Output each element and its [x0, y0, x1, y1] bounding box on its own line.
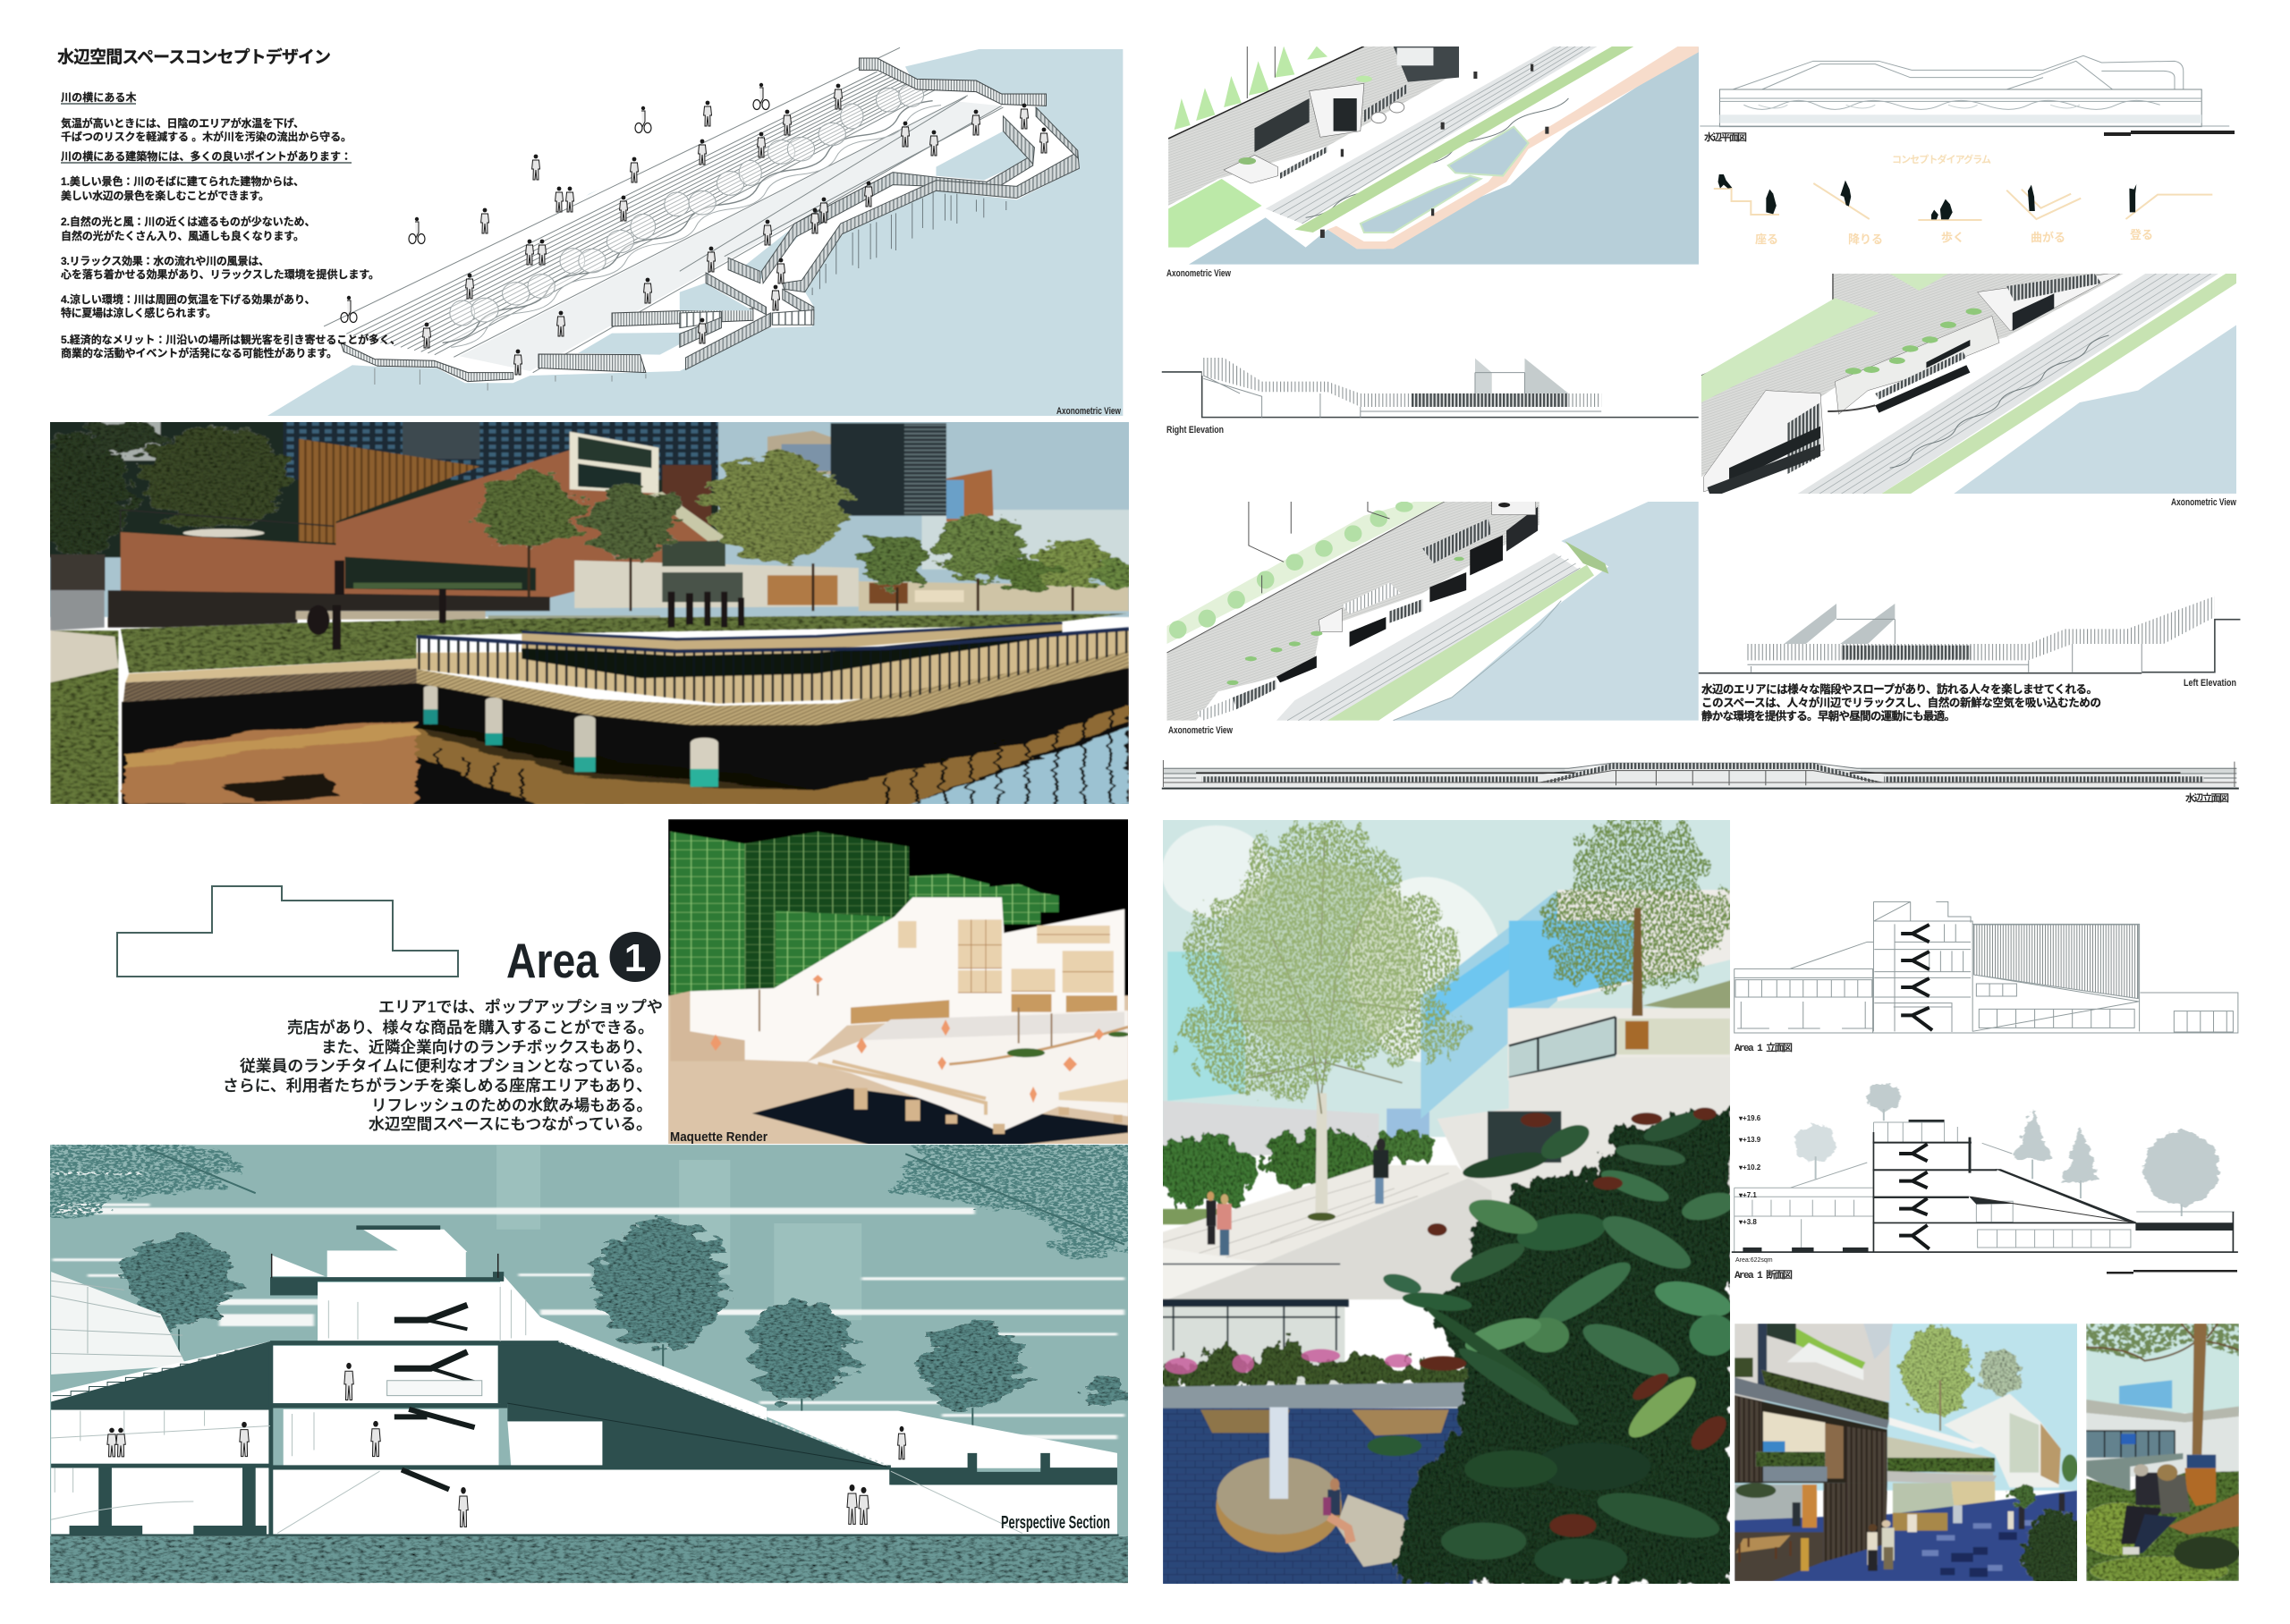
- text block: concept description: 3.リラックス効果：水の流れや川の風景は、: [61, 254, 269, 267]
- recess and courtyard: [1893, 1483, 1955, 1514]
- pools: [1361, 176, 1480, 233]
- timber bin: [2184, 1468, 2216, 1506]
- text block: concept description: 2.自然の光と風：川の近くは遮るものが少ないため、: [61, 215, 315, 228]
- water: [1189, 47, 1700, 265]
- text block: area 1 description: 水辺空間スペースにもつながっている。: [369, 1115, 652, 1133]
- foreground foliage mass: [1395, 1109, 1732, 1586]
- diagram labels: 座る: [1755, 233, 1778, 246]
- water: [1948, 325, 2236, 498]
- wave planter: [1306, 98, 1568, 217]
- diagram lines: [1714, 183, 2212, 220]
- dark water: [752, 1088, 1128, 1145]
- ground band: [50, 1536, 1131, 1583]
- human silhouettes: [307, 561, 744, 650]
- panel: maquette render: [668, 819, 1130, 1145]
- diagram labels: 曲がる: [2031, 231, 2065, 244]
- stepped band: [1266, 47, 1598, 224]
- title: 水辺空間スペースコンセプトデザイン: [57, 47, 331, 67]
- text block: concept description: 1.美しい景色：川のそばに建てられた建物からは、: [61, 174, 304, 188]
- section cut lines: [1732, 1120, 2238, 1253]
- text block: concept description: 自然の光がたくさん入り、風通しも良くなります。: [61, 229, 304, 242]
- stepped band: [1791, 274, 2218, 498]
- diagram: activity icons: [1714, 174, 2212, 220]
- stairs: elevation: [1901, 925, 1932, 1030]
- right white wing: [1944, 1393, 2061, 1487]
- drawing: long waterfront elevation: [1162, 760, 2239, 790]
- circular bench: [2168, 1493, 2239, 1535]
- trees behind: [1902, 1326, 2021, 1416]
- dark plinth: [108, 590, 550, 628]
- green strip: [1875, 274, 2236, 498]
- caption: waterfront elevation: 水辺立面図: [2185, 791, 2229, 804]
- blue pavement: [1163, 1408, 1473, 1586]
- sky: [1162, 817, 1732, 1137]
- text block: area 1 description: 従業員のランチタイムに便利なオプションとなっている。: [240, 1057, 652, 1075]
- model trees: [759, 984, 1051, 1046]
- text block: area 1 description: [223, 998, 663, 1133]
- pier columns: [424, 686, 718, 787]
- ghost trees: [450, 84, 924, 326]
- pier piles lower: [375, 368, 646, 391]
- text block: area 1 description: さらに、利用者たちがランチを楽しめる座席エリアもあり、: [223, 1077, 652, 1095]
- caption: left elevation: Left Elevation: [2184, 678, 2236, 689]
- window: [2086, 1431, 2175, 1458]
- terrace block: [1508, 1008, 1732, 1080]
- upper glazing: [570, 432, 658, 494]
- diagram labels: 降りる: [1848, 233, 1883, 246]
- neighbouring building left: [51, 1272, 186, 1374]
- building pieces: [1978, 274, 2120, 331]
- main boardwalk deck: [417, 629, 1129, 704]
- diagram labels: [1755, 228, 2153, 246]
- caption: area 1 section: Area 1 断面図: [1734, 1268, 1793, 1281]
- caption: waterfront plan: 水辺平面図: [1704, 131, 1747, 143]
- text block: concept description: 美しい水辺の景色を楽しむことができます。: [61, 189, 269, 202]
- section figures: [107, 1363, 905, 1527]
- soffit: [1642, 980, 1732, 1013]
- first tree trunk: [1315, 1093, 1327, 1217]
- broad leaves: [1368, 1106, 1737, 1579]
- pier piles: [812, 192, 1006, 295]
- scale bar: plan: [2104, 131, 2235, 136]
- text block: concept description: 特に夏場は涼しく感じられます。: [61, 306, 216, 319]
- background towers: [45, 420, 718, 557]
- timber screen: [299, 439, 479, 543]
- glazed canopy: [1163, 1302, 1344, 1384]
- seating steps edges: [53, 1348, 253, 1396]
- water: [1394, 502, 1699, 721]
- left tree canopy: [1177, 823, 1464, 1098]
- stepped band: [1276, 553, 1583, 721]
- level markers: ▾+19.6: [1738, 1114, 1761, 1122]
- white deck and walkway: [324, 51, 1079, 383]
- lower pool: [578, 333, 702, 355]
- heading: Area 1: Area: [506, 933, 598, 988]
- timber glazed bays: [898, 919, 1114, 993]
- escalators: [394, 1305, 475, 1489]
- timber ground model base: [668, 995, 1130, 1145]
- green glass towers: [670, 832, 745, 1002]
- walkway, pools and railings (upper right): [680, 97, 1079, 369]
- level markers: [1735, 1114, 1773, 1264]
- stepped seating lines: [324, 47, 1002, 373]
- dark building pieces: [1470, 535, 1503, 575]
- timber column and orange post: [1823, 1483, 1887, 1562]
- sky: [45, 420, 1140, 617]
- caption: maquette render: Maquette Render: [670, 1129, 768, 1145]
- plaza terrace: [807, 1011, 1128, 1132]
- text block: concept description: [61, 90, 401, 359]
- planting trees: [1845, 309, 1981, 375]
- drawing: left elevation: [1699, 596, 2240, 673]
- white massing: [690, 897, 1124, 1062]
- planter beam: [1163, 1383, 1464, 1409]
- text block: area 1 description: また、近隣企業向けのランチボックスもあり、: [321, 1038, 652, 1056]
- upper building: [1734, 1324, 1890, 1401]
- text block: waterfront note: 静かな環境を提供する。早朝や昼間の運動にも最適。: [1701, 709, 1955, 723]
- plaza: [1701, 274, 2124, 477]
- greenery: [1701, 298, 1879, 402]
- text block: waterfront note: [1701, 682, 2101, 723]
- left tree branches: [1232, 836, 1418, 1113]
- cream building and shopfront: [574, 561, 859, 608]
- roof rails: [272, 1254, 498, 1278]
- text block: concept description: 心を落ち着かせる効果があり、リラックスした環境を提供します。: [61, 267, 379, 281]
- silhouettes: [1718, 174, 2136, 219]
- caption: axonometric view 3: Axonometric View: [1168, 725, 1233, 736]
- brick building mass: [121, 450, 722, 597]
- upper greenery: [1168, 47, 1372, 248]
- text block: waterfront note: このスペースは、人々が川辺でリラックスし、自然の新鮮な空気を吸い込むための: [1701, 696, 2101, 709]
- left retaining wall: [50, 554, 105, 591]
- panel: courtyard render: [1150, 817, 1738, 1586]
- text block: concept description: 5.経済的なメリット：川沿いの場所は観光客を引き寄せることが多く、: [61, 333, 401, 346]
- diagram labels: 登る: [2130, 228, 2153, 241]
- timber railing and bench: [818, 1062, 986, 1115]
- hanging planters: [1761, 1370, 1889, 1420]
- background trees: [126, 1219, 1123, 1409]
- tree line: [1169, 502, 1413, 639]
- panel: top-left waterfront axonometric: [267, 47, 1123, 416]
- reddish leaves: [1420, 1108, 1730, 1537]
- white floor plates: [51, 1230, 1117, 1536]
- blue paving: [1734, 1491, 2077, 1581]
- green strip: [1294, 47, 1634, 233]
- blue building: [2119, 1380, 2172, 1408]
- shop window: [345, 557, 536, 591]
- seated person: [1323, 1478, 1356, 1544]
- level markers: Area:622sqm: [1735, 1257, 1773, 1264]
- lawn: [2086, 1471, 2239, 1581]
- pillar with wooden disc: [1216, 1459, 1342, 1552]
- text block: area 1 description: エリア1では、ポップアップショップや: [378, 998, 663, 1016]
- corner branches: [0, 1133, 1147, 1260]
- pale promenade strip: [460, 101, 1002, 371]
- flower planters: [1163, 1341, 1465, 1387]
- left boardwalk: [125, 659, 417, 682]
- panel: street-level render photo: [1734, 1324, 2091, 1594]
- glazing lines: [51, 1287, 1022, 1533]
- orange scale markers: [710, 975, 1104, 1103]
- tiny people: [1320, 64, 1548, 238]
- right tree canopy: [1536, 817, 1738, 987]
- level markers: ▾+3.8: [1738, 1218, 1757, 1226]
- caption: area 1 elevation: Area 1 立面図: [1734, 1041, 1793, 1054]
- drawing: area 1 section: [1732, 1083, 2238, 1253]
- grass bank: [121, 613, 1129, 673]
- terrace planter: [183, 529, 265, 537]
- meandering planters: [443, 101, 933, 343]
- text block: waterfront note: 水辺のエリアには様々な階段やスロープがあり、訪れる人々を楽しませてくれる。: [1701, 682, 2098, 696]
- axonometric figures: [341, 83, 1048, 375]
- heading: Area 1: 1: [624, 936, 646, 980]
- water and reflections: [122, 662, 1129, 805]
- drawing: waterfront plan: [1700, 55, 2229, 127]
- level markers: ▾+10.2: [1738, 1163, 1761, 1171]
- caption: axonometric view 2: Axonometric View: [2171, 497, 2236, 508]
- panel: upper axonometric (right sheet): [1168, 47, 1700, 265]
- sky wash: [50, 1145, 1131, 1538]
- sky: [1734, 1324, 2078, 1491]
- stepped plaza: [1163, 1165, 1468, 1299]
- stone ramp: [1166, 1178, 1496, 1300]
- diagram labels: 歩く: [1941, 231, 1964, 244]
- panel: middle axonometric: [1701, 274, 2236, 498]
- level markers: ▾+13.9: [1738, 1136, 1761, 1144]
- pine canopy and branches: [2086, 1324, 2239, 1359]
- heading: concept diagram: コンセプトダイアグラム: [1892, 153, 1991, 165]
- text block: concept description: 気温が高いときには、日陰のエリアが水温を下げ、: [61, 116, 304, 130]
- bench block: [1893, 1513, 1947, 1531]
- ghost trees: [1794, 1083, 2219, 1205]
- green strip: [1327, 565, 1594, 721]
- caption: axonometric view 1: Axonometric View: [1166, 268, 1231, 279]
- parapet and wall: [2086, 1400, 2239, 1423]
- scale bar: section: [2107, 1270, 2237, 1273]
- plaza: [1166, 502, 1539, 721]
- peach boardwalk: [1327, 47, 1699, 249]
- caption: right elevation: Right Elevation: [1166, 425, 1224, 436]
- seated couple: [2121, 1464, 2191, 1554]
- cloud streaks: [53, 1172, 1124, 1439]
- people: [1793, 1493, 2065, 1571]
- white facade: [1438, 1057, 1732, 1232]
- pilotis: [854, 1088, 1123, 1134]
- tree row: [1150, 1129, 1433, 1205]
- text block: area 1 description: リフレッシュのための水飲み場もある。: [371, 1096, 652, 1114]
- text block: concept description: 4.涼しい環境：川は周囲の気温を下げる効果があり、: [61, 292, 315, 306]
- sky: [2086, 1324, 2240, 1413]
- people on steps: [1207, 1138, 1388, 1256]
- text block: concept description: 川の横にある木: [61, 90, 136, 104]
- section stairs: [1899, 1144, 1930, 1249]
- shrubs: [2023, 1511, 2091, 1594]
- section poche: [51, 1225, 1119, 1536]
- panel: perspective section: [0, 1133, 1147, 1583]
- tree canopy masses: [30, 420, 1132, 595]
- heading: Area 1: [506, 932, 660, 988]
- drawing: area 1 elevation: [1734, 901, 2238, 1033]
- dark upper storey: [1734, 1395, 1887, 1483]
- icon: area 1 site silhouette: [117, 886, 458, 977]
- main building glass: [1421, 890, 1557, 1119]
- pampas grass: [50, 630, 118, 805]
- water surface: [267, 49, 1123, 416]
- left railings: [341, 58, 1047, 382]
- panel: tree bench render photo: [2079, 1324, 2240, 1586]
- drawing: right elevation: [1162, 358, 1699, 418]
- text block: concept description: 千ばつのリスクを軽減する 。木が川を汚染の流出から守る。: [61, 130, 352, 143]
- plaza: [1168, 47, 1459, 206]
- building block: [1254, 98, 1310, 152]
- text block: concept description: 商業的な活動やイベントが活発になる可能性があります。: [61, 346, 337, 359]
- panel: waterfront render photo: [30, 420, 1140, 805]
- caption: axonometric view: Axonometric View: [1056, 406, 1121, 417]
- black balustrade: [417, 629, 1129, 704]
- caption: perspective section: Perspective Section: [1001, 1513, 1110, 1533]
- distant cyan tower: [1167, 952, 1245, 1101]
- deck and furniture: [1734, 1532, 1823, 1581]
- panel: lower axonometric: [1166, 502, 1699, 721]
- back buildings: [1163, 1101, 1379, 1160]
- text block: concept description: 川の横にある建築物には、多くの良いポイントがあります：: [61, 149, 352, 163]
- text block: area 1 description: 売店があり、様々な商品を購入することができる。: [287, 1019, 654, 1036]
- white pitched roof edge: [649, 492, 729, 541]
- level markers: ▾+7.1: [1738, 1191, 1757, 1199]
- shore outline: [1394, 601, 1561, 721]
